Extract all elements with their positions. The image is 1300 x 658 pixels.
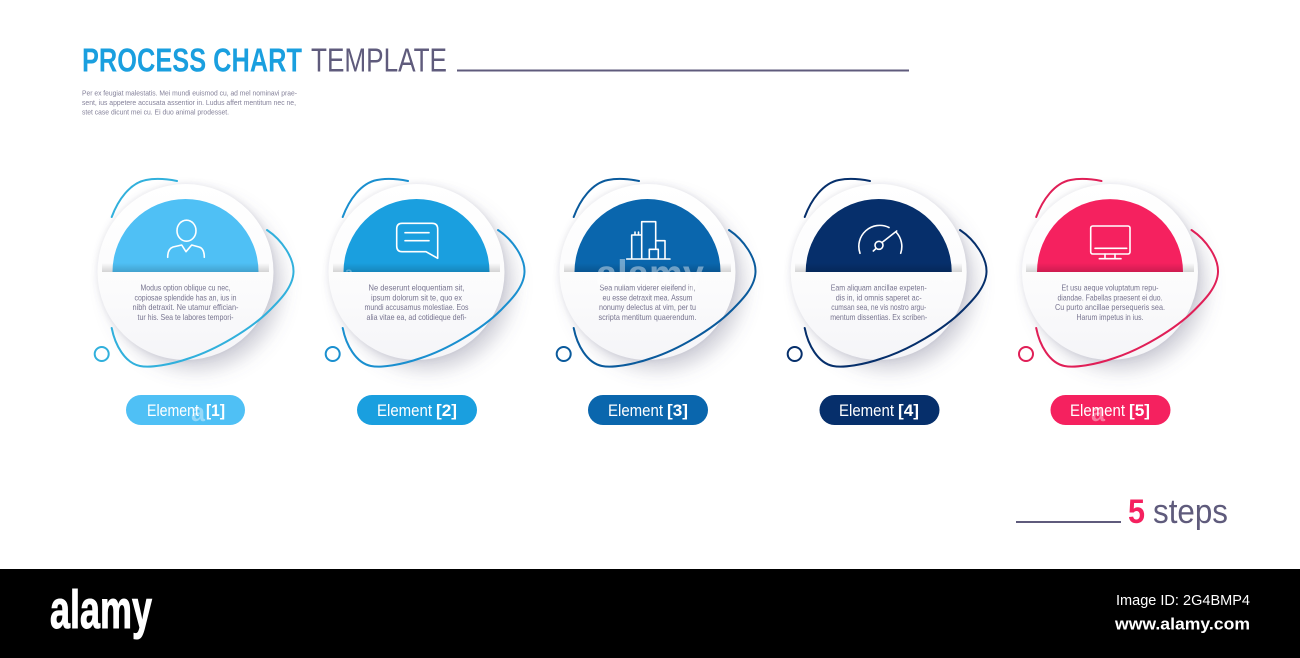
ring marker <box>557 347 571 361</box>
outline blob <box>1036 179 1218 367</box>
icon: monitor <box>1091 226 1130 259</box>
description: scripta mentitum quaerendum. <box>598 313 696 322</box>
watermark overlay: a <box>345 264 353 280</box>
pocket shadow band <box>564 263 731 272</box>
description: ipsum dolorum sit te, quo ex <box>371 294 462 302</box>
header semicircle <box>806 199 952 272</box>
header semicircle <box>574 199 720 272</box>
description: alia vitae ea, ad cotidieque defi- <box>366 313 467 322</box>
watermark overlay <box>191 253 1106 427</box>
circle card <box>791 184 967 360</box>
circle card <box>328 184 504 360</box>
label pill <box>1050 395 1170 425</box>
outline blob <box>574 179 756 367</box>
outline blob <box>112 179 294 367</box>
footer bar <box>0 569 1300 658</box>
description: eu esse detraxit mea. Assum <box>602 294 693 302</box>
footer logo: alamy <box>50 580 152 640</box>
soft shadow <box>558 183 744 370</box>
description: Modus option oblique cu nec, <box>140 284 230 292</box>
step count: steps <box>1153 493 1228 531</box>
label pill <box>588 395 708 425</box>
website: www.alamy.com <box>1114 614 1250 634</box>
title: TEMPLATE <box>311 42 447 78</box>
ring marker <box>326 347 340 361</box>
pocket shadow band <box>333 263 500 272</box>
label pill: Element <box>147 402 199 420</box>
ring marker <box>95 347 109 361</box>
label pill <box>357 395 477 425</box>
soft shadow <box>328 183 513 370</box>
label pill <box>820 395 940 425</box>
label pill: Element <box>839 402 894 420</box>
title rule <box>457 70 909 72</box>
pocket shadow band <box>795 263 962 272</box>
intro text: Per ex feugiat malestatis. Mei mundi euismod cu, ad mel nominavi prae- <box>82 88 297 98</box>
label pill: Element <box>1070 402 1125 420</box>
step count: 5 <box>1128 493 1145 531</box>
panel: step 3 <box>557 179 756 425</box>
panel: step 5 <box>1019 179 1218 425</box>
description: Cu purto ancillae persequeris sea. <box>1055 303 1165 312</box>
description: dis in, id omnis saperet ac- <box>836 294 922 302</box>
step count rule <box>1016 521 1121 523</box>
icon: buildings <box>627 222 670 259</box>
description: cumsan sea, ne vis nostro argu- <box>831 303 926 312</box>
description: tur his. Sea te labores tempori- <box>138 313 234 322</box>
circle card <box>560 184 736 360</box>
icon: person <box>168 220 204 257</box>
description: mundi accusamus molestiae. Eos <box>364 303 468 312</box>
watermark overlay: a <box>191 397 206 427</box>
circle card <box>98 184 274 360</box>
circle card <box>1022 184 1198 360</box>
description: nonumy delectus at vim, per tu <box>599 303 696 312</box>
description <box>830 284 927 322</box>
ring marker <box>788 347 802 361</box>
description <box>598 284 696 322</box>
ring marker <box>1019 347 1033 361</box>
description: Harum impetus in ius. <box>1076 313 1144 322</box>
label pill: [3] <box>667 402 688 420</box>
label pill: [2] <box>436 402 457 420</box>
description: nibh detraxit. Ne utamur effician- <box>132 303 239 312</box>
pocket shadow band <box>1026 263 1194 272</box>
panel: step 1 <box>95 179 294 425</box>
label pill: Element <box>608 402 663 420</box>
intro text <box>82 88 297 116</box>
soft shadow <box>1021 183 1206 370</box>
title: PROCESS CHART <box>82 42 302 78</box>
panel: step 2 <box>326 179 525 425</box>
label pill <box>126 395 245 425</box>
label pill: Element <box>377 402 432 420</box>
label pill: [4] <box>898 402 919 420</box>
soft shadow <box>790 183 975 370</box>
description: Ne deserunt eloquentiam sit, <box>368 284 464 292</box>
image id: Image ID: 2G4BMP4 <box>1116 593 1250 609</box>
description: Et usu aeque voluptatum repu- <box>1062 284 1159 292</box>
watermark overlay: a <box>1091 397 1106 427</box>
intro text: stet case dicunt mei cu. Ei duo animal prodesset. <box>82 108 229 116</box>
label pill: [1] <box>206 402 225 420</box>
icon: speech bubble <box>397 223 438 258</box>
description <box>132 284 239 322</box>
intro text: sent, ius appetere accusata assentior in. Ludus affert mentitum nec ne, <box>82 98 296 107</box>
pocket shadow band <box>102 263 269 272</box>
header semicircle <box>112 199 258 272</box>
header semicircle <box>1037 199 1183 272</box>
description <box>1055 284 1165 322</box>
description: copiosae splendide has an, ius in <box>134 294 237 302</box>
watermark overlay: a <box>943 269 952 286</box>
soft shadow <box>96 183 282 370</box>
description <box>364 284 468 322</box>
description: diandae. Fabellas praesent ei duo. <box>1058 294 1162 302</box>
description: Sea nullam viderer eleifend in, <box>600 284 696 292</box>
watermark overlay: alamy <box>596 253 704 294</box>
icon: gauge <box>859 225 902 253</box>
label pill: [5] <box>1129 402 1150 420</box>
panel: step 4 <box>788 179 987 425</box>
description: Eam aliquam ancillae expeten- <box>831 284 927 292</box>
outline blob <box>343 179 525 367</box>
outline blob <box>805 179 987 367</box>
header semicircle <box>344 199 490 272</box>
description: mentum dissentias. Ex scriben- <box>830 313 927 322</box>
